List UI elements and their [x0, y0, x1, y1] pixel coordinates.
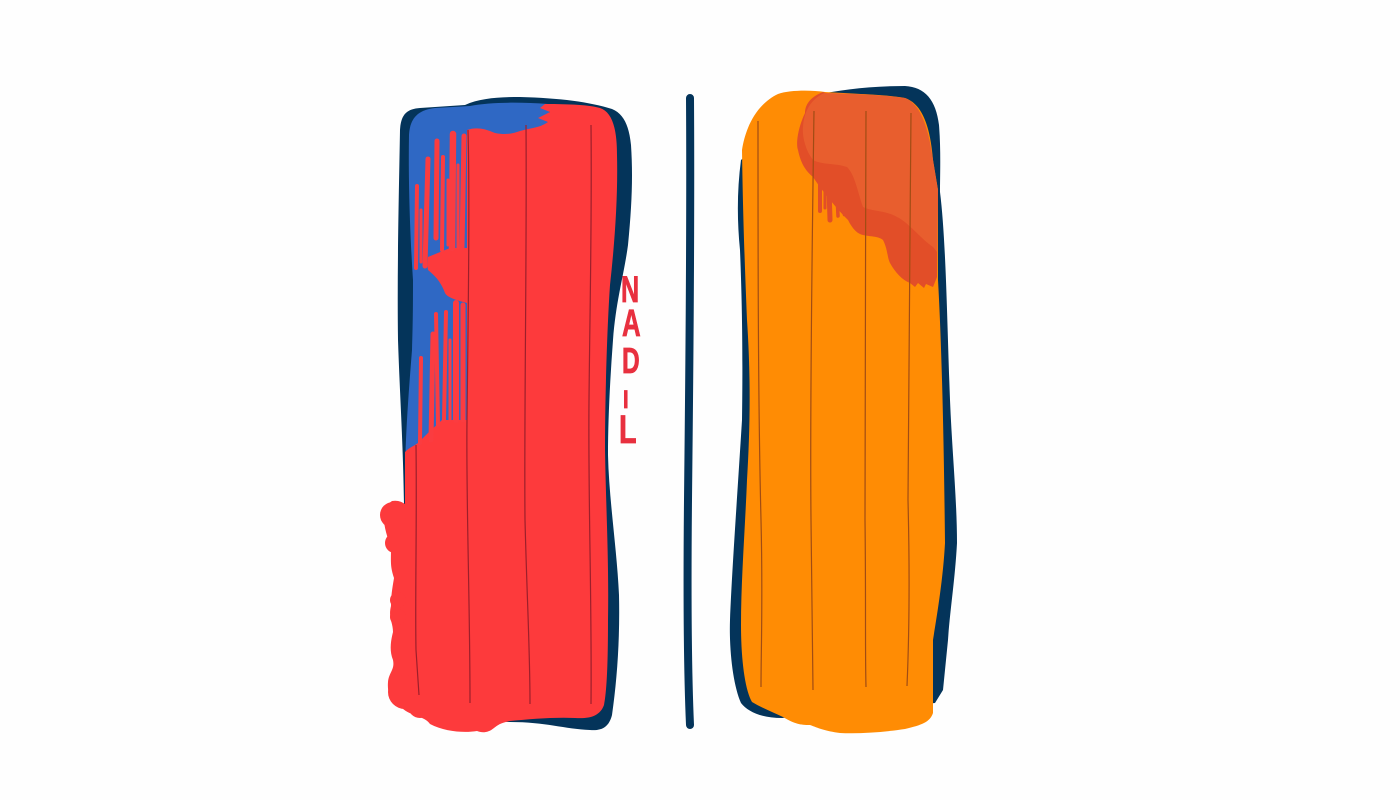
- vertical label: NADIL: [619, 268, 641, 452]
- right bar fine lines: [758, 111, 911, 690]
- left bar lumps: [380, 502, 432, 718]
- vertical label: NADIL: A: [622, 302, 641, 344]
- left bar blue underlayer: [405, 103, 552, 470]
- left bar red body: [384, 104, 617, 732]
- right bar orange body: [741, 91, 945, 733]
- left bar lower red streaks: [420, 303, 463, 443]
- vertical label: NADIL: I: [623, 386, 629, 414]
- right bar: orange: [730, 86, 957, 733]
- left bar: red over blue: [380, 97, 632, 732]
- left bar fine lines: [416, 125, 591, 704]
- center divider line: [688, 98, 690, 725]
- left bar upper red streaks: [416, 134, 464, 268]
- left bar navy outline: [398, 97, 632, 730]
- right bar drips: [820, 180, 844, 220]
- vertical label: NADIL: L: [619, 407, 637, 452]
- vertical label: NADIL: N: [621, 268, 639, 310]
- vertical label: NADIL: D: [622, 340, 640, 381]
- right bar overlay top: [803, 93, 938, 252]
- right bar navy outline: [730, 86, 957, 718]
- right bar dark overlay band: [797, 92, 938, 288]
